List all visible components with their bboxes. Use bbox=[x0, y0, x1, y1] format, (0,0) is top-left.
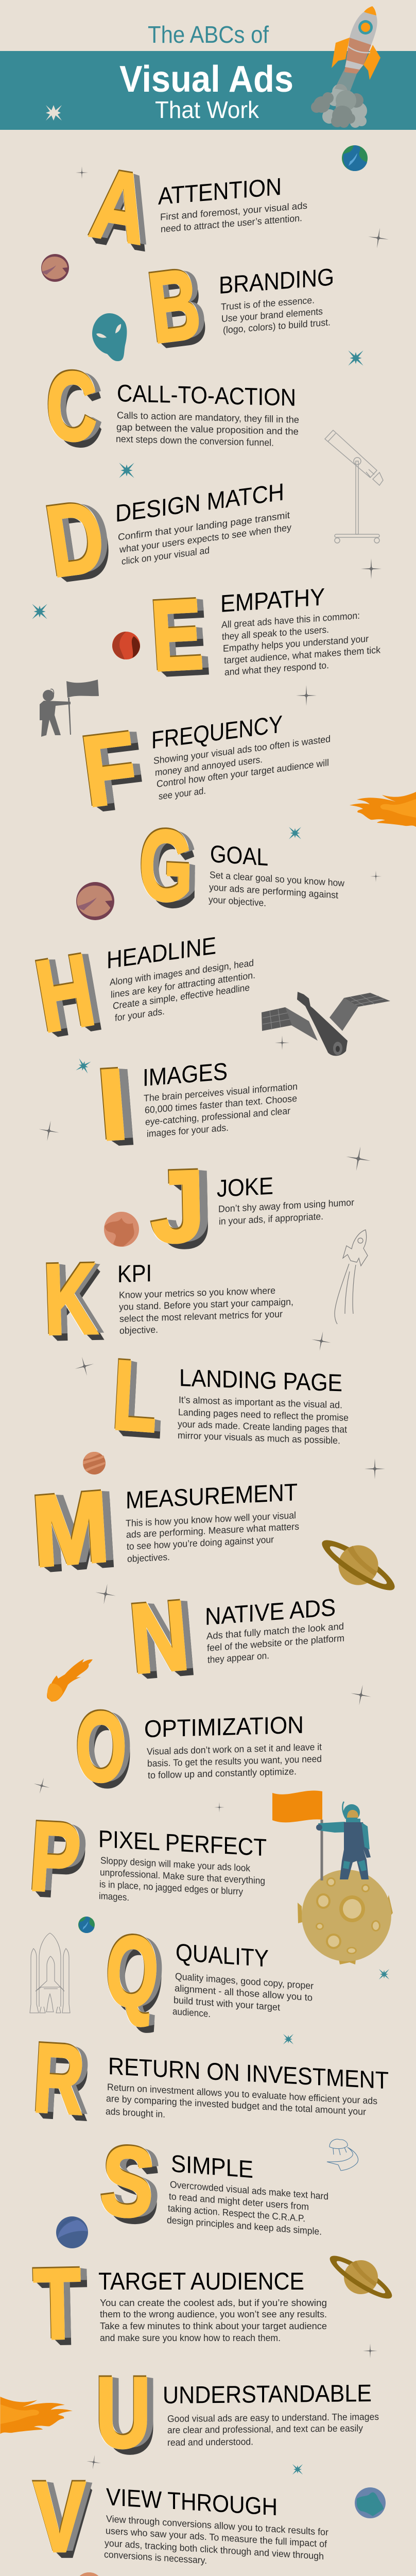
text block: they appear on. bbox=[207, 1650, 269, 1665]
text block bbox=[153, 733, 331, 802]
text block: Calls to action are mandatory, they fill in the bbox=[117, 410, 299, 425]
section: A Attention bbox=[84, 147, 307, 263]
icon: star bbox=[275, 1036, 289, 1050]
icon: star bbox=[349, 1683, 373, 1707]
text block bbox=[104, 2513, 328, 2573]
section: R Return on investment bbox=[30, 2022, 389, 2133]
text block bbox=[100, 2297, 327, 2343]
text block: Take a few minutes to think about your target audience bbox=[100, 2320, 327, 2331]
text block: 60,000 times faster than text. Choose bbox=[145, 1093, 297, 1115]
icon: earth planet bbox=[342, 145, 368, 171]
letter N: N bbox=[126, 1580, 192, 1692]
text block bbox=[178, 1394, 349, 1446]
text block: to read and might deter users from bbox=[169, 2191, 309, 2212]
heading: EMPATHY bbox=[220, 583, 325, 617]
icon: teal star bbox=[292, 2464, 303, 2475]
icon: grey astronaut with flag bbox=[40, 680, 99, 737]
text block: objective. bbox=[119, 1324, 158, 1336]
text block: Good visual ads are easy to understand. The images bbox=[167, 2411, 379, 2424]
text block: select the most relevant metrics for your bbox=[119, 1308, 283, 1324]
heading: VIEW THROUGH bbox=[106, 2483, 278, 2520]
letter J: J bbox=[149, 1148, 205, 1263]
text block: is in place, no jagged edges or blurry bbox=[99, 1878, 244, 1897]
text block: Overcrowded visual ads make text hard bbox=[170, 2179, 328, 2201]
text block: Visual ads don’t work on a set it and leave it bbox=[147, 1741, 322, 1757]
text block: The brain perceives visual information bbox=[144, 1081, 298, 1104]
title bbox=[119, 21, 293, 123]
text block: your ads, tracking both click through and view through bbox=[105, 2537, 324, 2562]
heading: LANDING PAGE bbox=[179, 1364, 342, 1396]
text block: and make sure you know how to reach them. bbox=[100, 2332, 281, 2343]
icon: star bbox=[214, 1802, 224, 1812]
title: The ABCs of bbox=[148, 21, 269, 48]
text block: Quality images, good copy, proper bbox=[175, 1971, 314, 1991]
section: I Images bbox=[93, 1047, 298, 1160]
icon: satellite bbox=[262, 992, 390, 1056]
section: D Design match bbox=[39, 479, 292, 597]
icon: brown planet bbox=[41, 254, 69, 282]
icon: orange planet bbox=[104, 1212, 139, 1247]
text block bbox=[206, 1620, 344, 1665]
text block: click on your visual ad bbox=[122, 545, 210, 567]
letter F: F bbox=[76, 710, 142, 826]
letter H: H bbox=[28, 932, 101, 1052]
text block bbox=[160, 200, 307, 234]
icon: light star bbox=[46, 105, 62, 121]
text block: Trust is of the essence. bbox=[221, 294, 315, 312]
text block: to follow up and constantly optimize. bbox=[148, 1766, 297, 1781]
heading: GOAL bbox=[210, 840, 268, 871]
letter U: U bbox=[95, 2356, 150, 2467]
icon: star bbox=[73, 1354, 96, 1378]
letter L: L bbox=[110, 1338, 160, 1451]
heading: DESIGN MATCH bbox=[115, 479, 284, 528]
text block: (logo, colors) to build trust. bbox=[223, 316, 331, 335]
header band bbox=[0, 51, 416, 130]
icon: comet flame bbox=[350, 792, 416, 827]
text block: Create a simple, effective headline bbox=[113, 982, 250, 1011]
icon: outlined space shuttle bbox=[30, 1933, 70, 2013]
title: That Work bbox=[155, 96, 259, 123]
text block: unprofessional. Make sure that everything bbox=[100, 1867, 265, 1886]
icon: rocket bbox=[332, 6, 380, 91]
text block: design principles and keep ads simple. bbox=[167, 2214, 322, 2237]
icon: teal star bbox=[76, 1058, 91, 1074]
icon: rocket smoke bbox=[311, 84, 367, 128]
heading: MEASUREMENT bbox=[126, 1478, 298, 1514]
text block bbox=[147, 1741, 322, 1781]
heading: QUALITY bbox=[176, 1938, 269, 1972]
text block: Set a clear goal so you know how bbox=[210, 869, 345, 889]
section: T Target audience bbox=[32, 2247, 327, 2359]
text block: basis. To get the results you want, you need bbox=[147, 1753, 322, 1769]
icon: blue planet bbox=[56, 2216, 88, 2248]
text block: next steps down the conversion funnel. bbox=[116, 433, 274, 448]
icon: star bbox=[361, 558, 382, 579]
icon: teal star bbox=[119, 463, 134, 478]
text block bbox=[172, 1971, 314, 2026]
text block: and what they respond to. bbox=[224, 659, 329, 677]
section: H Headline bbox=[28, 932, 255, 1052]
icon: astronaut with orange flag bbox=[272, 1790, 371, 1880]
text block: feel of the website or the platform bbox=[207, 1633, 344, 1653]
text block: users who saw your ads. To measure the full impact of bbox=[106, 2525, 327, 2549]
text block: All great ads have this in common: bbox=[221, 610, 360, 630]
heading: SIMPLE bbox=[171, 2149, 253, 2183]
text block: build trust with your target bbox=[174, 1994, 281, 2013]
text block bbox=[167, 2411, 379, 2448]
letter R: R bbox=[30, 2022, 86, 2133]
text block bbox=[209, 869, 345, 913]
text block: your ads are performing against bbox=[209, 882, 338, 901]
section: S Simple bbox=[96, 2124, 328, 2237]
text block: Empathy helps you understand your bbox=[223, 633, 369, 654]
letter B: B bbox=[143, 247, 205, 363]
icon: star bbox=[367, 226, 390, 250]
text block: alignment - all those allow you to bbox=[175, 1982, 313, 2003]
text block: need to attract the user’s attention. bbox=[161, 212, 302, 234]
icon: comet flame left bbox=[0, 2397, 73, 2434]
text block: Sloppy design will make your ads look bbox=[100, 1855, 251, 1873]
heading: HEADLINE bbox=[107, 932, 216, 974]
text block: gap between the value proposition and the bbox=[116, 421, 299, 437]
icon: telescope outline bbox=[325, 430, 383, 543]
icon: alien bbox=[92, 313, 127, 361]
text block bbox=[110, 957, 255, 1024]
icon: small comet bbox=[47, 1659, 93, 1702]
icon: teal star bbox=[32, 604, 47, 619]
text block: First and foremost, your visual ads bbox=[160, 200, 307, 223]
section: K KPI bbox=[42, 1242, 293, 1354]
icon: saturn bbox=[321, 2243, 401, 2311]
text block: objectives. bbox=[127, 1551, 170, 1564]
text block bbox=[144, 1081, 298, 1139]
icon: star bbox=[94, 1582, 117, 1606]
text block: Return on investment allows you to evaluate how efficient your ads bbox=[107, 2081, 377, 2106]
letter C: C bbox=[46, 351, 96, 460]
text block: It’s almost as important as the visual ad. bbox=[179, 1394, 342, 1410]
heading: BRANDING bbox=[219, 263, 334, 299]
heading: ATTENTION bbox=[158, 173, 282, 210]
letter O: O bbox=[75, 1691, 126, 1801]
text block: This is how you know how well your visual bbox=[126, 1510, 296, 1529]
section: V View through bbox=[32, 2461, 328, 2571]
text block: Along with images and design, head bbox=[110, 957, 254, 988]
text block: conversions is necessary. bbox=[104, 2549, 207, 2566]
icon: star bbox=[310, 1330, 333, 1352]
text block: in your ads, if appropriate. bbox=[219, 1211, 323, 1227]
text block: Know your metrics so you know where bbox=[119, 1285, 275, 1300]
icon: star bbox=[365, 1459, 385, 1479]
heading: PIXEL PERFECT bbox=[98, 1825, 267, 1861]
icon: star bbox=[31, 1775, 52, 1796]
section: N Native ads bbox=[126, 1580, 344, 1692]
icon: small earth bbox=[78, 1917, 95, 1933]
letter S: S bbox=[96, 2124, 158, 2237]
text block: your ads made. Create landing pages that bbox=[178, 1418, 347, 1435]
text block: money and annoyed users. bbox=[155, 754, 263, 778]
heading: OPTIMIZATION bbox=[144, 1711, 304, 1742]
text block: Don’t shy away from using humor bbox=[218, 1197, 354, 1214]
icon: star bbox=[344, 1144, 373, 1173]
text block: View through conversions allow you to track results for bbox=[106, 2513, 328, 2537]
icon: teal star bbox=[289, 827, 301, 839]
text block: they all speak to the users. bbox=[222, 624, 329, 642]
heading: IMAGES bbox=[143, 1057, 228, 1091]
text block bbox=[218, 1197, 354, 1227]
letter K: K bbox=[42, 1242, 98, 1354]
letter D: D bbox=[39, 479, 110, 597]
text block: Confirm that your landing page transmit bbox=[118, 510, 290, 543]
heading: UNDERSTANDABLE bbox=[163, 2379, 372, 2409]
text block bbox=[99, 1855, 265, 1910]
section: F Frequency bbox=[76, 710, 331, 826]
text block: see your ad. bbox=[159, 785, 206, 802]
text block: for your ads. bbox=[115, 1006, 165, 1023]
text block bbox=[116, 410, 299, 449]
text block bbox=[119, 1284, 293, 1336]
section: M Measurement bbox=[28, 1469, 299, 1586]
text block bbox=[167, 2179, 328, 2238]
icon: striped planet bbox=[80, 1449, 108, 1477]
heading: RETURN ON INVESTMENT bbox=[108, 2052, 389, 2094]
text block: ads brought in. bbox=[106, 2106, 165, 2120]
text block: Landing pages need to reflect the promise bbox=[178, 1406, 349, 1423]
letter P: P bbox=[26, 1801, 83, 1911]
section: O Optimization bbox=[75, 1691, 322, 1801]
text block bbox=[106, 2081, 377, 2130]
icon: saturn bbox=[311, 1525, 405, 1605]
icon: outlined ufo bbox=[327, 2139, 358, 2171]
text block: are by comparing the invested budget and the total amount your bbox=[106, 2093, 366, 2117]
section: L Landing page bbox=[110, 1338, 349, 1451]
letter T: T bbox=[32, 2247, 81, 2359]
icon: teal star bbox=[379, 1969, 389, 1979]
heading: JOKE bbox=[217, 1172, 273, 1202]
heading: FREQUENCY bbox=[151, 710, 283, 754]
section: C Call-to-action bbox=[46, 351, 299, 460]
icon: moon bbox=[298, 1870, 393, 1964]
section: J Joke bbox=[149, 1148, 354, 1263]
icon: striped planet bbox=[75, 2572, 103, 2576]
text block: read and understood. bbox=[167, 2436, 253, 2448]
section: E Empathy bbox=[147, 578, 381, 690]
letter G: G bbox=[138, 808, 193, 922]
text block bbox=[118, 509, 292, 567]
text block: lines are key for attracting attention. bbox=[111, 970, 255, 1000]
icon: star bbox=[76, 166, 88, 179]
heading: NATIVE ADS bbox=[205, 1594, 336, 1630]
title: Visual Ads bbox=[119, 59, 293, 100]
icon: brown planet large bbox=[76, 882, 114, 920]
heading: CALL-TO-ACTION bbox=[117, 379, 296, 411]
text block: Ads that fully match the look and bbox=[206, 1621, 344, 1641]
section: B Branding bbox=[143, 247, 334, 363]
text block: Use your brand elements bbox=[221, 306, 323, 324]
text block bbox=[221, 608, 381, 677]
icon: star bbox=[296, 685, 317, 706]
text block: mirror your visuals as much as possible. bbox=[178, 1430, 340, 1446]
icon: outlined rocket bbox=[335, 1230, 368, 1324]
text block: you stand. Before you start your campaign, bbox=[119, 1296, 293, 1312]
heading: KPI bbox=[117, 1259, 152, 1287]
section: Q Quality bbox=[102, 1914, 314, 2033]
letter E: E bbox=[147, 578, 205, 690]
letter A: A bbox=[84, 147, 155, 263]
heading: TARGET AUDIENCE bbox=[98, 2267, 304, 2295]
icon: star bbox=[85, 2454, 102, 2470]
letter V: V bbox=[33, 2461, 84, 2571]
icon: star bbox=[37, 1119, 61, 1143]
icon: teal star bbox=[283, 2034, 293, 2044]
text block bbox=[126, 1510, 299, 1564]
text block: images for your ads. bbox=[147, 1122, 229, 1139]
section: U Understandable bbox=[95, 2356, 379, 2467]
section: G Goal bbox=[138, 808, 345, 922]
text block: eye-catching, professional and clear bbox=[145, 1105, 290, 1127]
text block: You can create the coolest ads, but if you’re showing bbox=[100, 2297, 327, 2308]
text block: to see how you’re doing against your bbox=[127, 1534, 274, 1552]
icon: star bbox=[370, 871, 382, 882]
icon: teal star bbox=[348, 350, 363, 366]
text block: ads are performing. Measure what matters bbox=[126, 1521, 299, 1540]
text block: your objective. bbox=[209, 894, 266, 908]
text block: audience. bbox=[172, 2006, 211, 2019]
text block: Showing your visual ads too often is wasted bbox=[153, 733, 331, 766]
text block: what your users expects to see when they bbox=[119, 522, 292, 555]
icon: star bbox=[363, 2344, 377, 2358]
section: P Pixel perfect bbox=[26, 1801, 267, 1911]
text block: taking action. Respect the C.R.A.P. bbox=[168, 2202, 305, 2224]
text block: target audience, what makes them tick bbox=[224, 644, 381, 666]
icon: teal blue planet bbox=[355, 2487, 386, 2518]
text block: are clear and professional, and text can be easily bbox=[167, 2422, 363, 2435]
letter Q: Q bbox=[102, 1914, 161, 2027]
text block: Control how often your target audience will bbox=[157, 757, 329, 789]
text block: images. bbox=[99, 1890, 129, 1903]
text block bbox=[221, 293, 331, 335]
letter I: I bbox=[93, 1047, 130, 1160]
icon: red planet bbox=[112, 632, 140, 659]
letter M: M bbox=[28, 1469, 111, 1586]
text block: them to the wrong audience, you won’t see any results. bbox=[100, 2309, 327, 2319]
